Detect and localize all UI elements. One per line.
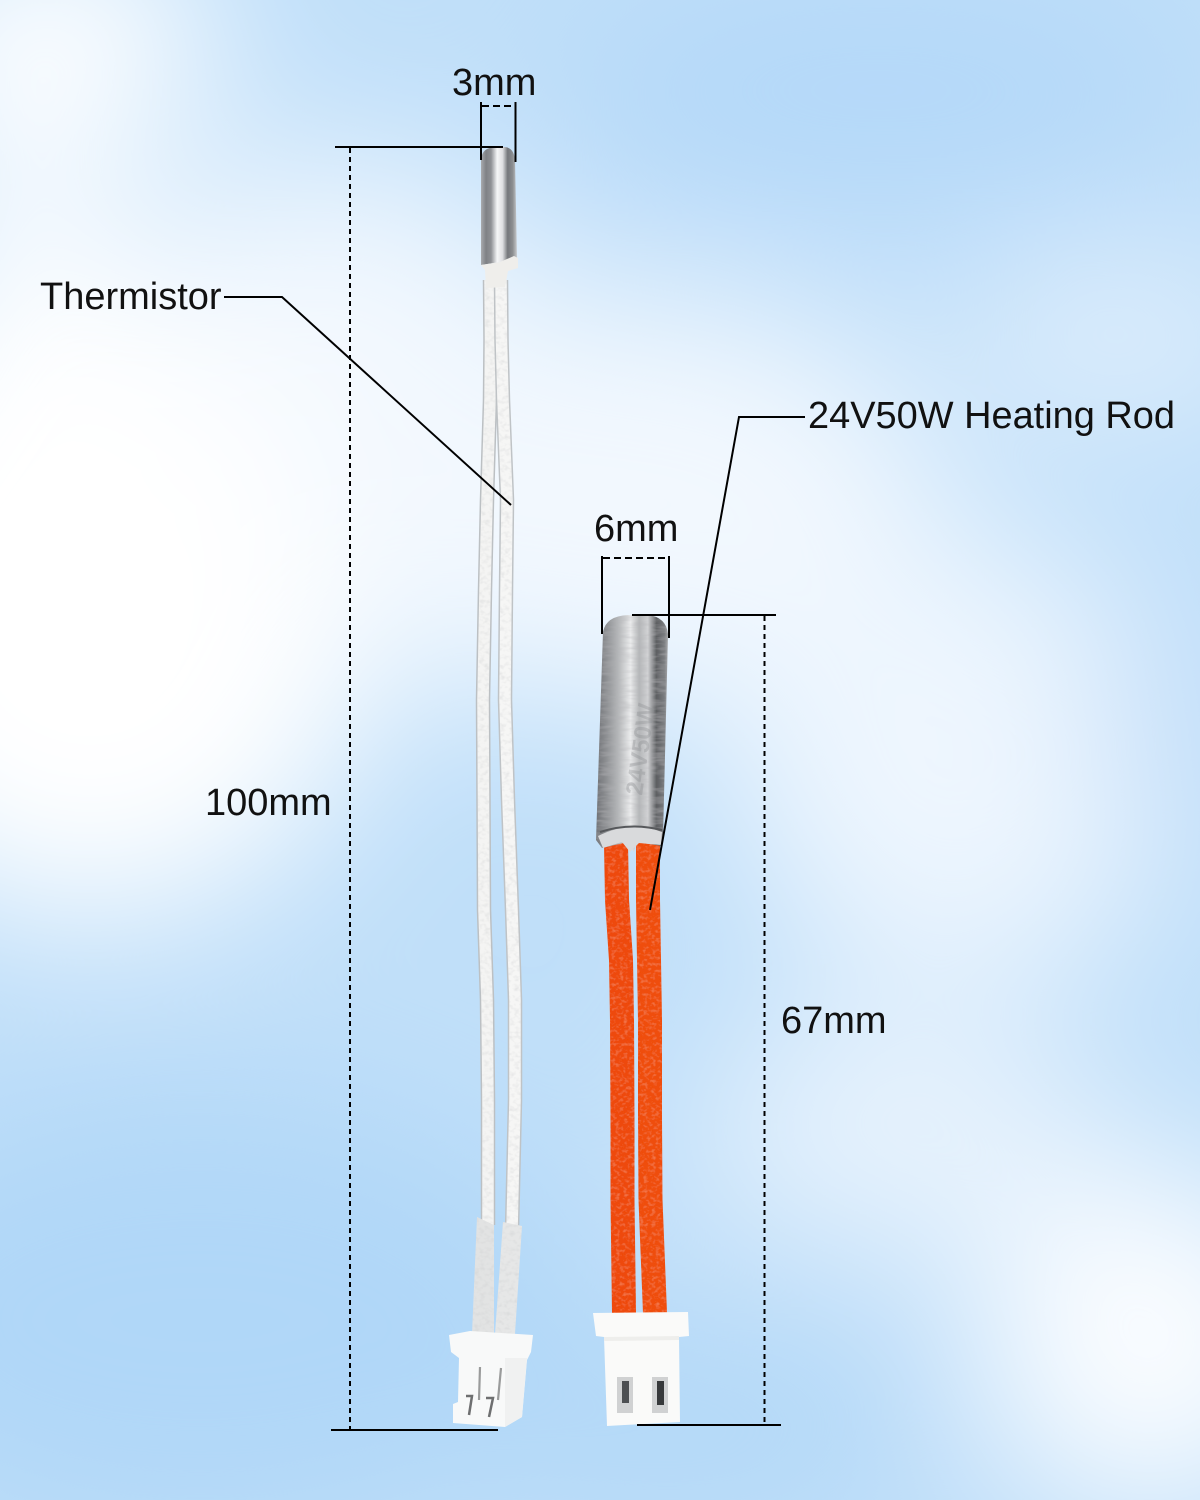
engraved rod marking: 24V50W [621,702,661,797]
thermistor assembly [449,147,533,1427]
dimension: 100mm [205,147,503,1430]
heating rod orange wires [616,843,655,1313]
dimension: 3mm: 3mm [452,62,536,104]
thermistor sleeves [472,1217,522,1334]
dimension: 67mm [632,615,887,1425]
heating rod white connector [593,1312,689,1426]
heating rod metal body [596,615,668,852]
callout: 24V50W heating rod: 24V50W Heating Rod [808,395,1175,437]
callout: thermistor: Thermistor [40,276,222,318]
thermistor metal probe [481,147,518,288]
dimension: 6mm: 6mm [594,508,678,550]
dimension: 67mm: 67mm [781,1000,887,1042]
dimension: 100mm: 100mm [205,782,332,824]
connector pins [617,1377,668,1413]
callout: thermistor [40,276,511,505]
dimension: 3mm [452,62,536,162]
thermistor white wires [483,280,515,1230]
callout: 24V50W heating rod [650,395,1175,910]
dimension: 6mm [594,508,678,638]
heating rod assembly [593,615,689,1426]
thermistor white connector [449,1331,533,1427]
